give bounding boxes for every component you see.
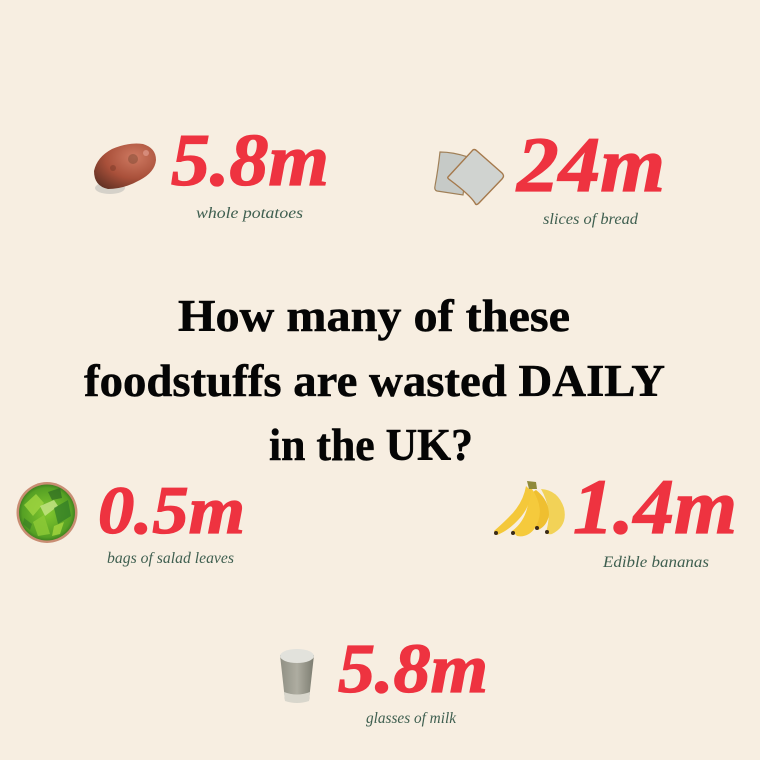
number: 1.4m: 1.4m [573,463,737,550]
icon: potato [94,144,156,194]
title: in the UK? [269,420,473,470]
panel: milk [280,631,488,727]
number: 5.8m: 5.8m [171,120,329,202]
number: 5.8m: 5.8m [338,631,488,708]
panel: bananas [494,463,737,571]
title: foodstuffs are wasted DAILY [84,356,665,406]
panel: bread [435,121,665,228]
number: 24m: 24m [516,121,665,208]
label: glasses of milk: glasses of milk [366,710,457,727]
label: whole potatoes: whole potatoes [196,205,303,222]
label: bags of salad leaves: bags of salad leaves [107,550,234,567]
icon: salad bowl [16,482,78,543]
icon: bananas [494,481,565,536]
label: slices of bread: slices of bread [543,211,639,228]
icon: glass of milk [280,649,314,703]
panel: salad [16,472,245,567]
title [84,291,665,470]
label: Edible bananas: Edible bananas [602,554,709,571]
title: How many of these [178,291,570,341]
number: 0.5m: 0.5m [98,472,245,548]
icon: bread slices [435,150,504,204]
panel: potatoes [94,120,329,222]
